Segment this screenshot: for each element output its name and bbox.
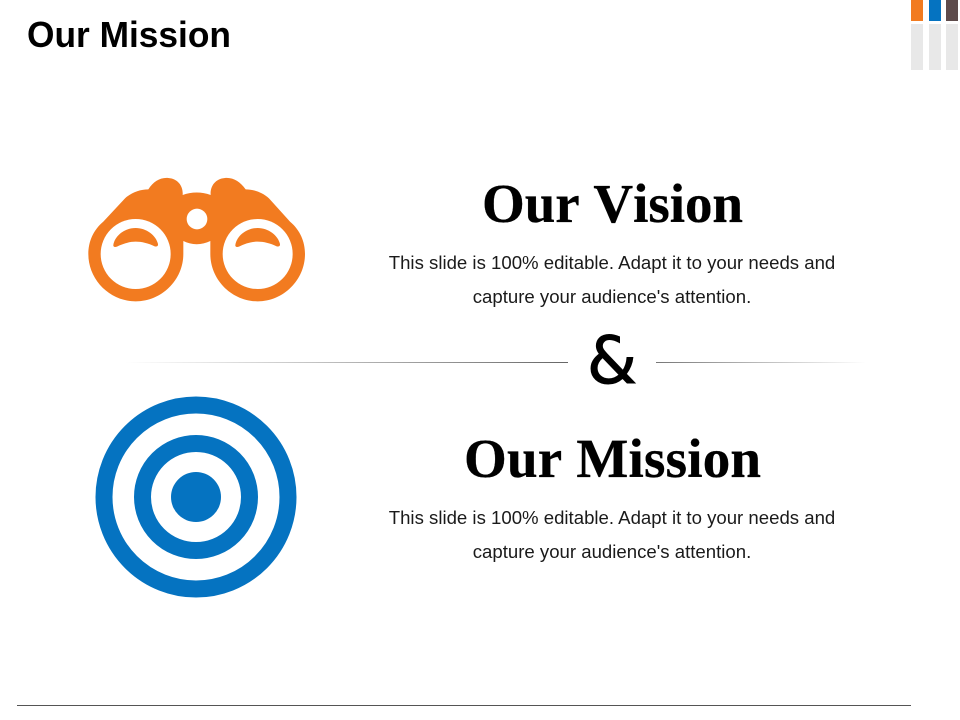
icon: binoculars [88,178,305,301]
text block: mission description: capture your audience's attention. [473,541,751,562]
corner decoration bars [911,0,958,70]
text block: vision description: capture your audience's attention. [473,286,751,307]
footer rule [17,705,911,706]
heading: our vision: Our Vision [482,173,743,234]
text block: mission description: This slide is 100% editable. Adapt it to your needs and [389,507,835,528]
icon: target [104,405,288,589]
divider with ampersand: & [587,324,637,399]
title: Our Mission [27,14,231,55]
text block: vision description [389,252,835,307]
heading: our mission: Our Mission [464,428,761,489]
text block: mission description [389,507,835,562]
text block: vision description: This slide is 100% editable. Adapt it to your needs and [389,252,835,273]
